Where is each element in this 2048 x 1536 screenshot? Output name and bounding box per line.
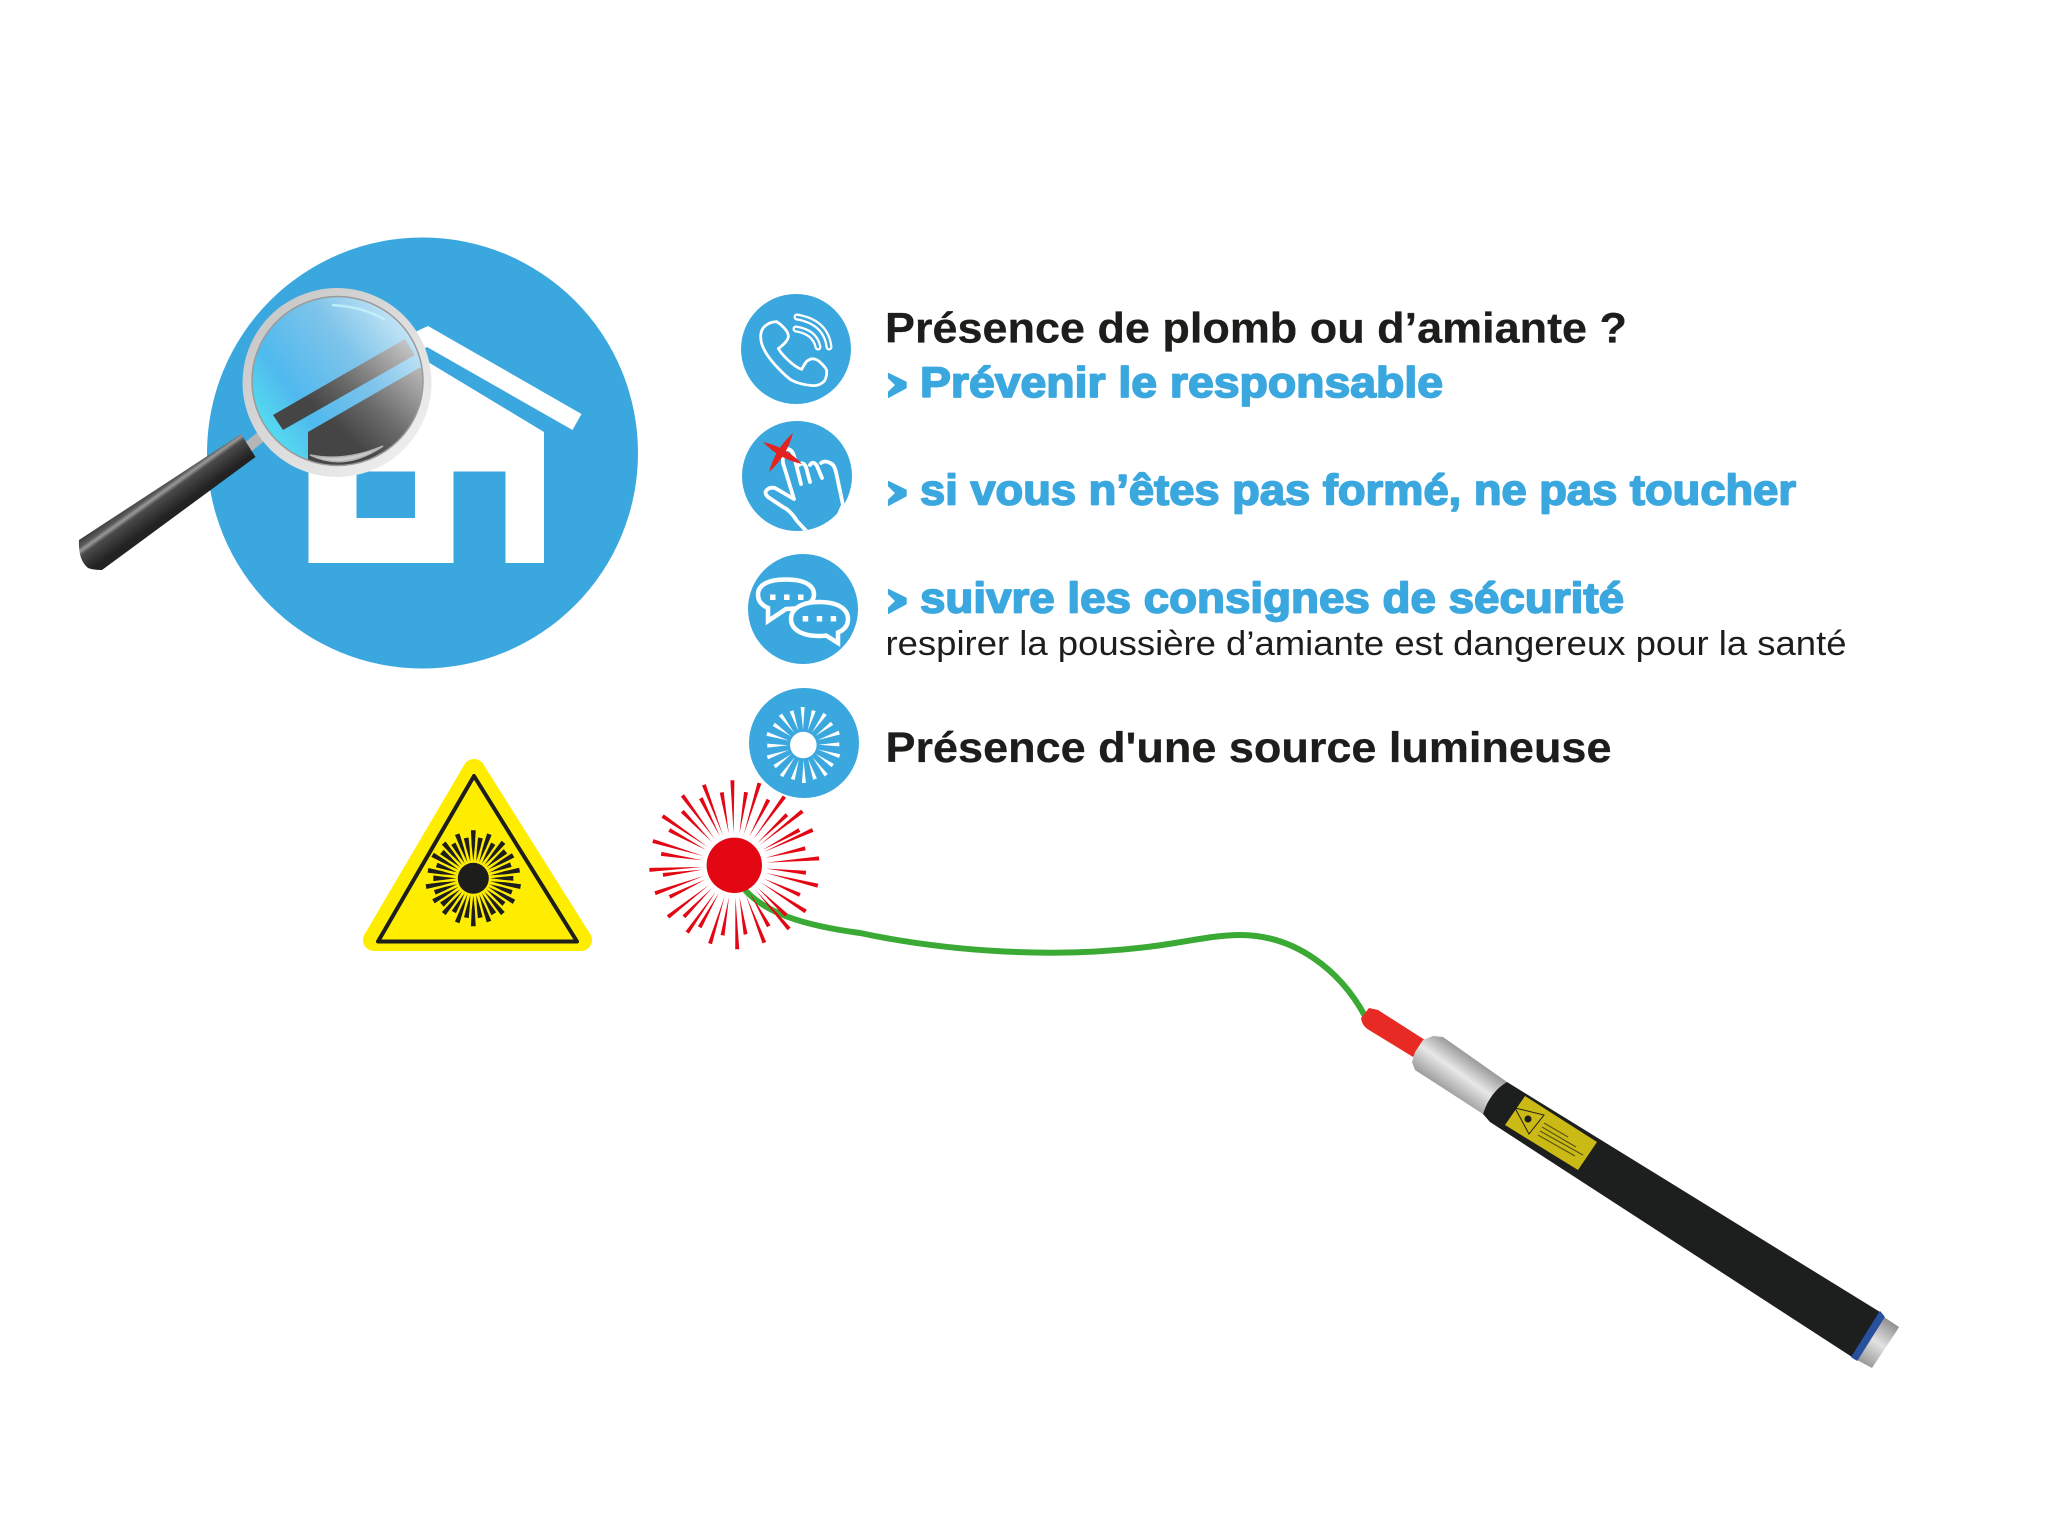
magnifier rim	[242, 288, 432, 477]
blue disc	[207, 238, 638, 668]
silver collar	[1412, 1036, 1507, 1114]
text: asbestos dust warning: respirer la poussière d’amiante est dangereux pour la santé	[886, 625, 1846, 663]
red tip	[1361, 1008, 1425, 1057]
black body	[1483, 1082, 1880, 1357]
house body	[308, 362, 544, 563]
right bubble	[791, 602, 848, 643]
heading: light source: Présence d'une source lumineuse	[886, 724, 1612, 772]
icon: red laser spot	[649, 780, 819, 949]
icon: chat bubbles	[748, 554, 858, 664]
magnifier glass	[252, 297, 422, 465]
green laser cable	[745, 890, 1365, 1016]
icon: hand with red cross	[742, 421, 852, 535]
icon: laser warning triangle	[374, 770, 581, 942]
yellow label	[1505, 1096, 1597, 1170]
instruction: do not touch: si vous n’êtes pas formé, ne pas toucher	[920, 466, 1796, 514]
house roof	[300, 326, 582, 430]
icon: phone	[741, 294, 851, 404]
red cross	[763, 433, 802, 472]
laser pointer	[1361, 1008, 1899, 1368]
icon: light burst	[749, 688, 859, 798]
silver end cap	[1857, 1317, 1899, 1368]
blue ring	[1852, 1312, 1884, 1360]
icon: house under magnifying glass	[79, 238, 638, 668]
magnifier handle	[79, 434, 263, 570]
instruction: follow safety rules: suivre les consignes de sécurité	[920, 574, 1624, 622]
left bubble	[758, 580, 814, 621]
instruction: alert the manager: Prévenir le responsable	[920, 359, 1443, 407]
heading: lead or asbestos: Présence de plomb ou d’amiante ?	[885, 304, 1627, 352]
